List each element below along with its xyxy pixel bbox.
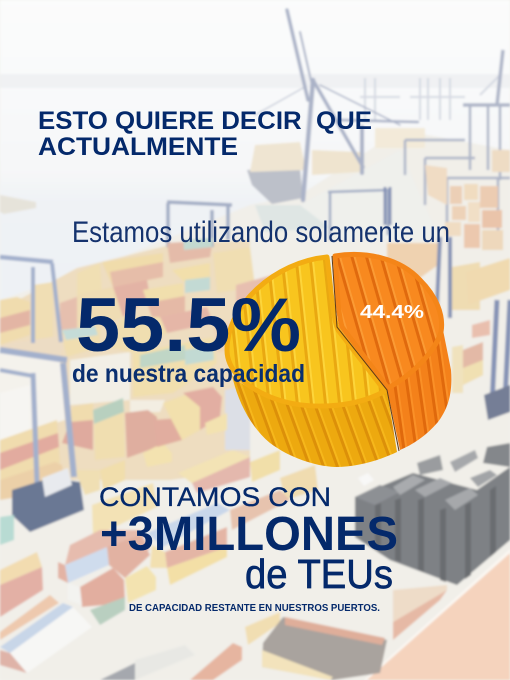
container yard base tone (0, 240, 250, 500)
pie slice: yellow top 55.5% (227, 257, 385, 406)
mid cranes (167, 190, 390, 247)
callout unit: de TEUs (245, 551, 393, 597)
right yard containers (387, 243, 438, 278)
callout footnote: DE CAPACIDAD RESTANTE EN NUESTROS PUERTOS. (129, 602, 380, 614)
subtitle: Estamos utilizando solamente un (72, 216, 450, 249)
left yard stacks (0, 297, 30, 345)
callout line 1: CONTAMOS CON (99, 482, 331, 512)
top container rows (77, 263, 102, 295)
center containers (92, 483, 157, 537)
callout number: +3MILLONES (100, 508, 398, 561)
title (38, 107, 372, 161)
salmon ground, bottom right (367, 553, 510, 680)
black container block (355, 467, 510, 585)
bottom machinery (245, 612, 280, 645)
dark crane machinery, bottom left (12, 478, 84, 532)
far quay cranes (360, 75, 500, 120)
pie slice: yellow side wall (232, 375, 397, 467)
pie slice: orange top 44.4% (335, 254, 442, 388)
title: ACTUALMENTE (38, 133, 238, 161)
pie label: 44.4% (360, 302, 424, 322)
stat caption: de nuestra capacidad (72, 360, 305, 388)
pie chart: corrugated container cylinder (227, 254, 451, 467)
capacity callout (99, 482, 398, 614)
bottom-left containers (0, 552, 42, 585)
left gantry cranes (0, 257, 74, 483)
pie slice: orange side wall (387, 330, 451, 450)
ship (247, 168, 303, 204)
big stat: 55.5%: 55.5% (76, 283, 301, 368)
right gantry legs (385, 187, 510, 405)
far right crane gantries (405, 50, 510, 230)
far right container piles (425, 150, 510, 250)
title: ESTO QUIERE DECIR QUE (38, 107, 372, 135)
main ship crane (255, 10, 418, 200)
